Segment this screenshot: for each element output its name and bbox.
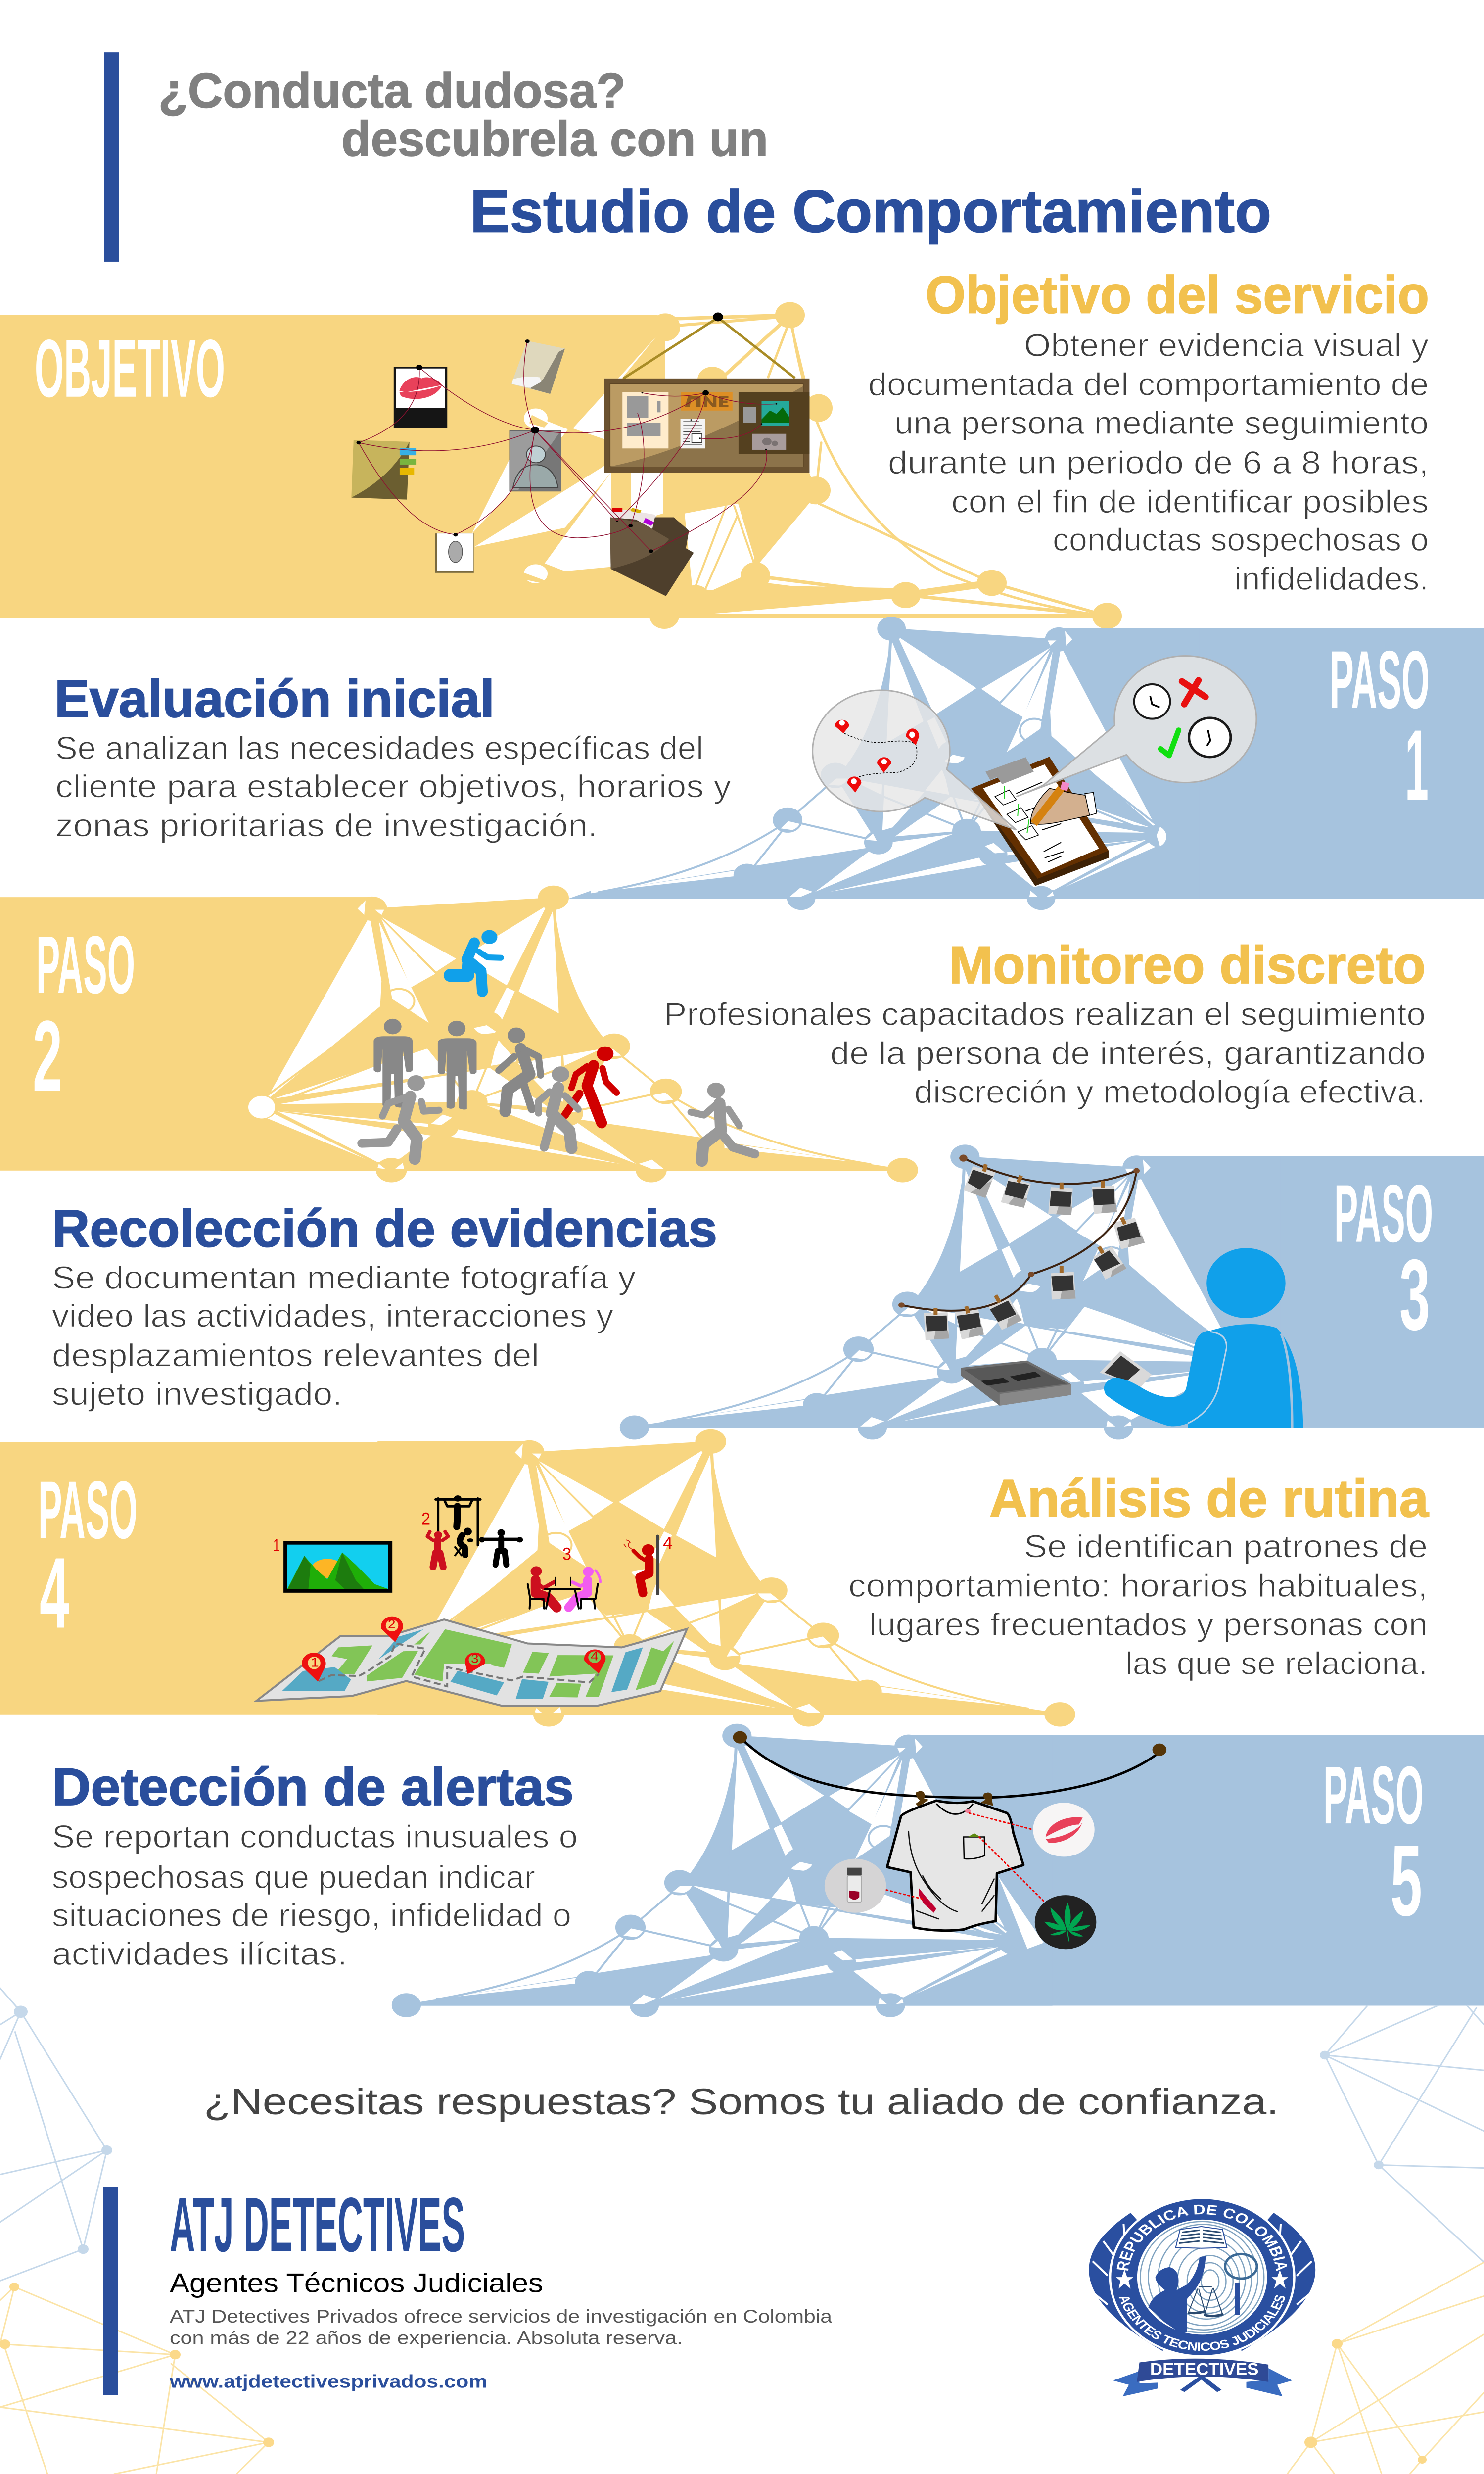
objetivo white gaps [472,336,681,583]
band paso 5 [909,1735,1484,2006]
band paso 4 [0,1442,529,1715]
figure: walker front [538,1066,578,1148]
panel: paso 2 [0,886,1426,1182]
t-shirt [887,1801,1023,1931]
clothesline [733,1731,1166,1807]
footer accent bar [103,2187,118,2395]
figure: walking man [499,1028,541,1111]
figure: blue runner [450,930,501,992]
text block: paso 4: lugares frecuentados y personas con [869,1607,1428,1642]
heading: deteccion: Detección de alertas [52,1758,574,1817]
heading: monitoreo discreto: Monitoreo discreto [949,936,1426,995]
text block: objetivo: conductas sospechosas o [1053,522,1429,558]
magnifying glass [1225,2254,1257,2315]
text block: paso 3 [52,1260,636,1412]
text block: paso 3: sujeto investigado. [52,1376,342,1412]
icon: routine scenes and map [256,1495,687,1706]
band paso 3 [1138,1156,1484,1428]
title: ¿Conducta dudosa? [158,63,626,118]
text block: paso 4: Se identifican patrones de [1024,1528,1428,1564]
scene and map numbers: 3 [471,1652,479,1665]
icon: photos on string and investigator [898,1154,1303,1428]
icon: kiss circle [1033,1803,1095,1856]
laurel wreath [1089,2197,1315,2357]
icon: clipboard and speech bubbles [813,656,1256,886]
scene and map numbers: 1 [311,1655,319,1669]
red strings and pins [359,341,776,551]
network paso 2 [220,886,918,1182]
panel: paso 5: 5 [1391,1824,1422,1937]
text block: paso 5: situaciones de riesgo, infidelidad o [52,1897,571,1933]
title [158,63,1271,245]
panel: paso 3: 3 [1399,1238,1430,1351]
icon: cannabis leaf circle [1035,1895,1096,1949]
text block: paso 4: las que se relaciona. [1125,1645,1428,1681]
text block: objetivo: documentada del comportamiento de [868,366,1429,402]
panel: paso 2: 2 [33,1000,62,1112]
text block: paso 2: discreción y metodología efectiva. [914,1074,1426,1110]
panel: paso 4 [0,1429,1429,1726]
dining couple [528,1566,600,1609]
corner network: left yellow [0,2283,274,2474]
corner network: right yellow [1287,2262,1484,2474]
scene and map numbers [273,1509,673,1669]
folding map [256,1617,687,1706]
seal text [1116,2205,1288,2351]
panel: objetivo: OBJETIVO [35,323,225,414]
text block: paso 3: Se documentan mediante fotografía y [52,1260,636,1295]
network paso 1 [555,617,1199,910]
clipboard [971,757,1109,886]
text block: objetivo [868,327,1429,597]
heading: recoleccion: Recolección de evidencias [52,1199,717,1258]
gym figures [436,1495,523,1565]
red dotted connectors [886,1813,1045,1903]
objetivo network background [0,302,1122,629]
text block: paso 1: zonas prioritarias de investigación. [55,808,598,843]
band paso 2 [0,897,373,1171]
text block: paso 3: desplazamientos relevantes del [52,1337,539,1373]
panel: paso 5 [52,1724,1484,2017]
panel: paso 4: 4 [40,1537,69,1649]
scene and map numbers: 3 [562,1544,571,1564]
figure: red suspect [565,1047,617,1123]
title accent bar [104,52,119,262]
title: Estudio de Comportamiento [470,177,1271,245]
fingerprint card [435,533,474,573]
text block: objetivo: con el fin de identificar posibles [951,483,1429,520]
scene and map numbers: 4 [663,1533,673,1553]
figure: running man [362,1075,439,1159]
panel: paso 4: PASO [38,1464,138,1556]
footer: company block: www.atjdetectivesprivados.com [169,2372,487,2392]
footer: company block: ATJ DETECTIVES [170,2182,465,2268]
text block: paso 2 [664,996,1426,1110]
text block: paso 1: cliente para establecer objetivos, horarios y [55,768,731,804]
scene and map numbers: 1 [273,1535,280,1555]
icon: evidence board illustration [351,312,809,596]
folder [610,508,694,596]
node: white right tip paso 1 [1157,827,1166,847]
bubble: route map [813,690,1016,830]
scene and map numbers: 2 [388,1618,396,1631]
ribbon: DETECTIVES [1150,2360,1258,2379]
text block: paso 4: comportamiento: horarios habituales, [848,1568,1428,1604]
footer: company block: ATJ Detectives Privados ofrece servicios de investigación en Colombia [170,2306,832,2327]
text block: paso 3: video las actividades, interacciones y [52,1298,613,1334]
heading: analisis: Análisis de rutina [989,1469,1429,1528]
bubble: schedule clocks [1016,656,1256,797]
scene and map numbers: 4 [591,1649,599,1663]
footer: company block: con más de 22 años de experiencia. Absoluta reserva. [170,2328,683,2348]
panel: paso 2: PASO [36,919,135,1010]
scales [1188,2286,1223,2316]
text block: paso 5: sospechosas que puedan indicar [52,1859,535,1895]
scene and map numbers: 2 [421,1509,430,1528]
heading: evaluacion inicial: Evaluación inicial [54,669,495,728]
figure: right walker [691,1083,755,1161]
text block: paso 2: de la persona de interés, garantizando [830,1035,1426,1071]
text block: paso 5 [52,1818,578,1972]
seal text: AGENTES TECNICOS JUDICIALES [1119,2295,1285,2351]
text block: paso 4 [848,1528,1428,1681]
lady justice [1148,2256,1206,2333]
network gap near leaf [998,1876,1044,1949]
footer: company block: Agentes Técnicos Judiciales [170,2268,543,2298]
text block: paso 2: Profesionales capacitados realizan el seguimiento [664,996,1426,1032]
node: white left tip [248,1096,275,1119]
seal text: REPUBLICA DE COLOMBIA [1117,2205,1287,2271]
network tip without node [553,884,591,912]
portrait card [510,430,561,491]
icon: shirt with evidence [733,1731,1166,1949]
strings with clips [898,1154,1140,1315]
text block: objetivo: infidelidades. [1234,561,1429,597]
call to action: ¿Necesitas respuestas? Somos tu aliado de confianza. [204,2081,1279,2122]
icon: surveillance figures [362,930,755,1161]
seal ring [1111,2199,1293,2355]
person with photo [1100,1248,1303,1428]
corner network: left blue [0,1988,112,2281]
panel: objetivo [0,265,1429,629]
figure: standing men [373,1019,476,1109]
text block: objetivo: Obtener evidencia visual y [1024,327,1429,363]
ribbon [1113,2359,1292,2396]
network paso 5 [392,1724,1053,2017]
kiss photo [394,367,447,428]
book [1176,2227,1227,2248]
network paso 4 [377,1429,1075,1726]
network paso 3 [620,1144,1281,1439]
text block: paso 1 [55,730,731,843]
icon: blood tube circle [825,1859,886,1913]
panel: paso 1 [54,617,1484,912]
text block: objetivo: una persona mediante seguimiento [894,405,1429,441]
fingerprint center [1137,2220,1267,2334]
band paso 1 [1057,628,1484,899]
logo: agentes tecnicos judiciales seal [1089,2199,1316,2397]
corner network: right blue [1320,2005,1484,2262]
smoker [624,1536,658,1593]
polaroid photos [924,1166,1145,1340]
picture frame [283,1541,392,1593]
text block: paso 5: Se reportan conductas inusuales o [52,1818,578,1855]
text block: paso 1: Se analizan las necesidades específicas del [55,730,703,766]
footer: company block [169,2182,832,2392]
panel: paso 3 [52,1144,1484,1439]
title: descubrela con un [341,111,768,166]
text block: paso 5: actividades ilícitas. [52,1936,347,1972]
panel: paso 1: 1 [1405,709,1429,821]
red flexing man [427,1531,448,1567]
photo tray [961,1361,1071,1406]
text block: objetivo: durante un periodo de 6 a 8 horas, [888,444,1429,480]
